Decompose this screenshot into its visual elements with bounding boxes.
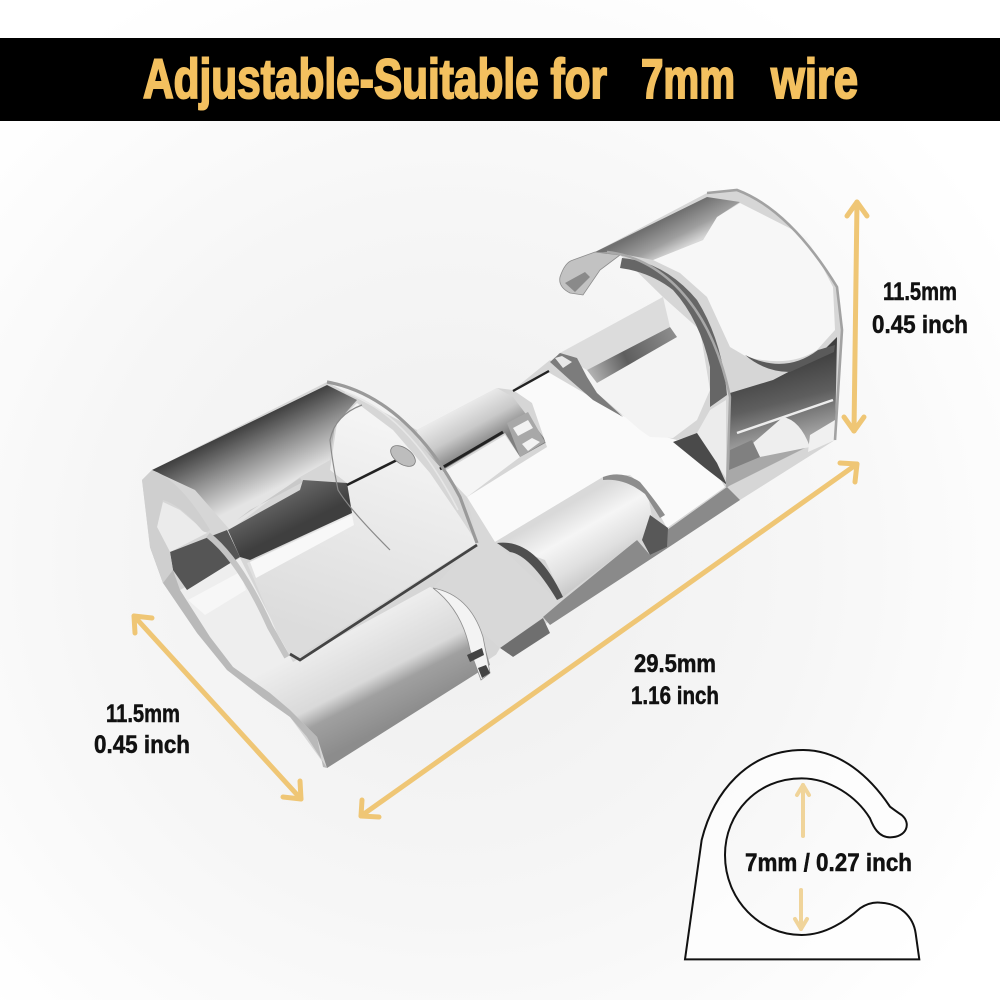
left arch top dark band xyxy=(152,385,357,530)
base lower left join xyxy=(490,648,513,665)
right post upper strip xyxy=(558,297,670,370)
front cylinder end shadow xyxy=(642,515,668,555)
left arch mid grey patch xyxy=(237,478,303,520)
rear center post xyxy=(417,388,547,470)
deck dark line xyxy=(513,371,549,391)
label: height: 11.5mm xyxy=(883,278,957,306)
left arch small nub xyxy=(387,441,419,471)
wedge highlight xyxy=(555,356,572,368)
label: length xyxy=(631,650,719,710)
left arch inner rim highlight xyxy=(345,392,458,510)
label: height: 0.45 inch xyxy=(872,311,968,339)
white stripe under strip xyxy=(250,515,354,578)
window light bits xyxy=(513,420,540,451)
title banner xyxy=(0,38,1000,121)
lower post shadow xyxy=(729,440,760,470)
label: height xyxy=(872,278,968,339)
lower front base xyxy=(180,558,490,768)
title text: 7mm xyxy=(641,47,735,110)
arrow: inner diameter down xyxy=(795,890,807,929)
light triangle below rim xyxy=(697,400,726,478)
right arch lip tip xyxy=(560,252,620,295)
small post in lower panel xyxy=(753,417,810,457)
right arch outer rim xyxy=(707,190,842,440)
label: length: 29.5mm xyxy=(634,650,716,678)
title text: wire xyxy=(770,47,858,110)
right arch front rim xyxy=(607,252,730,487)
lower panel right light corner xyxy=(808,420,835,452)
right arch lower dark panel xyxy=(727,337,837,487)
label: width xyxy=(94,700,190,759)
product: transparent cable clip xyxy=(142,190,842,768)
left arch xyxy=(142,382,477,660)
arrow: length dimension xyxy=(361,463,857,817)
arrow: width dimension xyxy=(134,616,301,799)
left opening dark band xyxy=(170,530,240,590)
light strip on base xyxy=(188,572,246,615)
left opening upper light xyxy=(157,502,207,552)
left arch outer rim xyxy=(327,382,477,543)
white strip under rear post xyxy=(443,435,520,497)
post dark marks xyxy=(467,648,490,678)
left arch main glass xyxy=(247,403,477,660)
left glass edge band xyxy=(208,535,287,657)
dark wedge beneath lens xyxy=(673,433,727,485)
label: inner diameter: 7mm / 0.27 inch xyxy=(745,849,912,877)
lip dark detail xyxy=(565,272,590,292)
title text: Adjustable-Suitable for xyxy=(143,47,607,110)
rear post dark line xyxy=(440,432,503,469)
front cylinder dark curve xyxy=(497,543,563,600)
base dark notch xyxy=(500,618,550,657)
front left post xyxy=(433,588,490,680)
label: width: 11.5mm xyxy=(106,700,180,728)
frosted end of base xyxy=(150,547,327,768)
arrow: height dimension xyxy=(844,202,867,431)
base dark band xyxy=(543,487,740,625)
right arch xyxy=(560,190,842,487)
arrow: inner diameter up xyxy=(797,785,809,836)
right arch inner dark rim xyxy=(620,258,727,407)
right arch main lens xyxy=(653,203,835,361)
arch thin line behind glass xyxy=(347,460,397,485)
frosted top of left end xyxy=(142,470,210,583)
label: length: 1.16 inch xyxy=(631,682,719,710)
clip outline xyxy=(685,750,919,959)
lower panel light stripe xyxy=(737,400,833,433)
right arch top dark band xyxy=(595,197,740,260)
lens dark arc xyxy=(745,345,835,372)
left arch inner dark strip xyxy=(228,480,352,560)
front center cylinder xyxy=(495,475,652,597)
cross-section diagram xyxy=(685,750,919,959)
grey plate between arch and deck xyxy=(433,497,563,648)
left arch inner curve xyxy=(330,405,390,550)
label: width: 0.45 inch xyxy=(94,731,190,759)
front cylinder end ring xyxy=(603,474,665,518)
rear post window xyxy=(507,412,545,457)
left arch bottom lip xyxy=(290,545,477,660)
right post end wedge xyxy=(550,353,623,417)
right post dark band xyxy=(587,327,677,383)
right rear post xyxy=(550,297,710,438)
white center deck xyxy=(467,372,725,542)
clip silhouette xyxy=(142,190,842,768)
